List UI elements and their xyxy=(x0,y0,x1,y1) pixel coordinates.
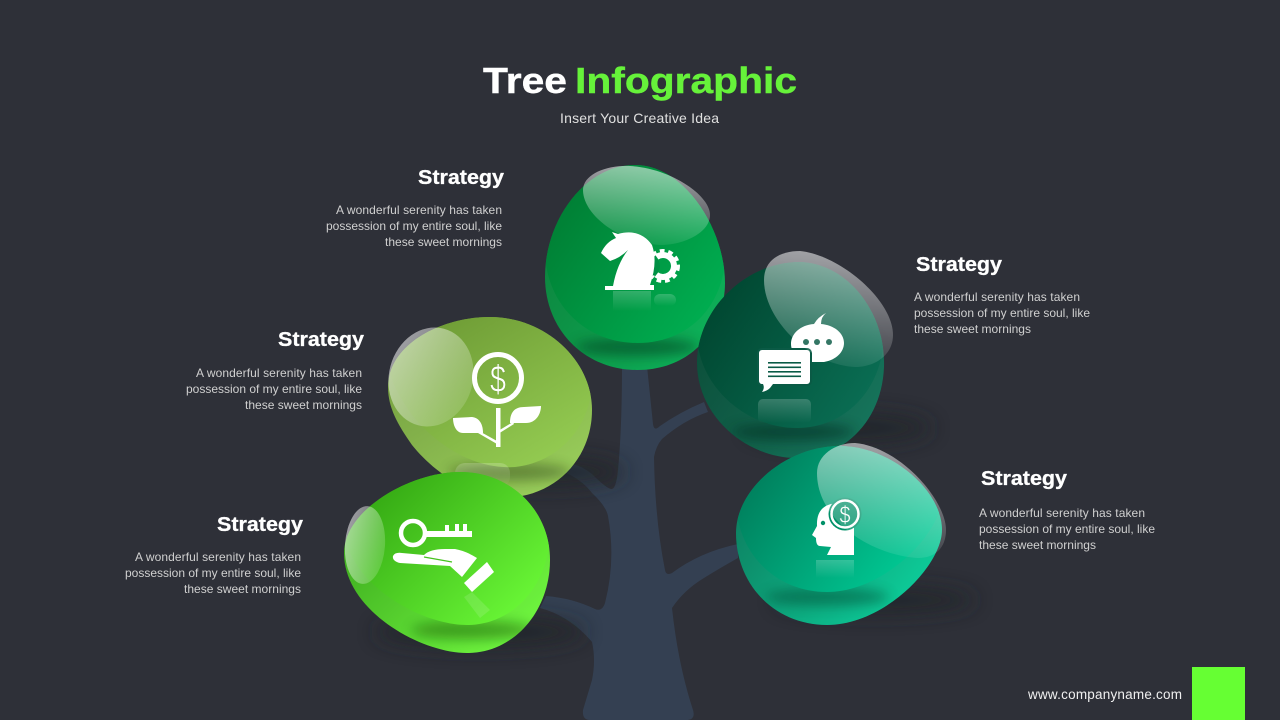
glass highlight xyxy=(764,251,893,367)
text block: middle left strategy: possession of my entire soul, like xyxy=(186,382,362,396)
text block: middle left strategy: Strategy xyxy=(278,329,365,351)
blob: dark green xyxy=(697,232,893,458)
blob: teal xyxy=(736,413,946,625)
text block: middle left strategy: A wonderful serenity has taken xyxy=(196,366,362,380)
title: Infographic xyxy=(575,60,797,101)
icon: chess knight and gear xyxy=(601,232,678,290)
text block: upper right strategy: these sweet mornings xyxy=(914,322,1031,336)
text block: lower right strategy: Strategy xyxy=(981,468,1068,490)
text block: lower right strategy: these sweet mornings xyxy=(979,538,1096,552)
icon: chat bubbles xyxy=(758,313,844,392)
text block: lower right strategy: possession of my entire soul, like xyxy=(979,522,1155,536)
icon: dollar plant xyxy=(453,354,541,447)
text block: upper right strategy: Strategy xyxy=(916,254,1003,276)
blob: bright green xyxy=(344,472,550,653)
icon: head with dollar coin: $ xyxy=(840,502,850,529)
shadows under blobs xyxy=(375,412,975,648)
text block: upper right strategy: possession of my entire soul, like xyxy=(914,306,1090,320)
title: Tree xyxy=(483,60,567,101)
text block: bottom left strategy xyxy=(125,514,304,596)
icon: dollar plant: $ xyxy=(490,359,506,401)
glass highlight xyxy=(583,166,710,245)
glass highlight xyxy=(342,505,388,585)
blob: light green xyxy=(388,317,592,496)
text block: bottom left strategy: A wonderful serenity has taken xyxy=(135,550,301,564)
text block: top left strategy: possession of my entire soul, like xyxy=(326,219,502,233)
text block: upper right strategy: A wonderful serenity has taken xyxy=(914,290,1080,304)
subtitle: Insert Your Creative Idea xyxy=(560,110,719,126)
icon: key and hand xyxy=(393,521,494,592)
text block: middle left strategy xyxy=(186,329,365,412)
text block: top left strategy xyxy=(326,167,505,249)
icon: head with dollar coin xyxy=(812,498,862,555)
text block: top left strategy: Strategy xyxy=(418,167,505,189)
blob: top green xyxy=(545,165,725,370)
text block: lower right strategy xyxy=(979,468,1155,552)
text block: bottom left strategy: possession of my entire soul, like xyxy=(125,566,301,580)
text block: upper right strategy xyxy=(914,254,1090,336)
green accent square xyxy=(1192,667,1245,720)
text block: top left strategy: A wonderful serenity has taken xyxy=(336,203,502,217)
text block: lower right strategy: A wonderful serenity has taken xyxy=(979,506,1145,520)
footer url: www.companyname.com xyxy=(1027,687,1182,702)
text block: bottom left strategy: Strategy xyxy=(217,514,304,536)
text block: top left strategy: these sweet mornings xyxy=(385,235,502,249)
glass highlight xyxy=(377,318,485,436)
glass highlight xyxy=(817,443,946,558)
tree trunk and branches xyxy=(540,366,738,720)
text block: middle left strategy: these sweet mornings xyxy=(245,398,362,412)
text block: bottom left strategy: these sweet mornings xyxy=(184,582,301,596)
